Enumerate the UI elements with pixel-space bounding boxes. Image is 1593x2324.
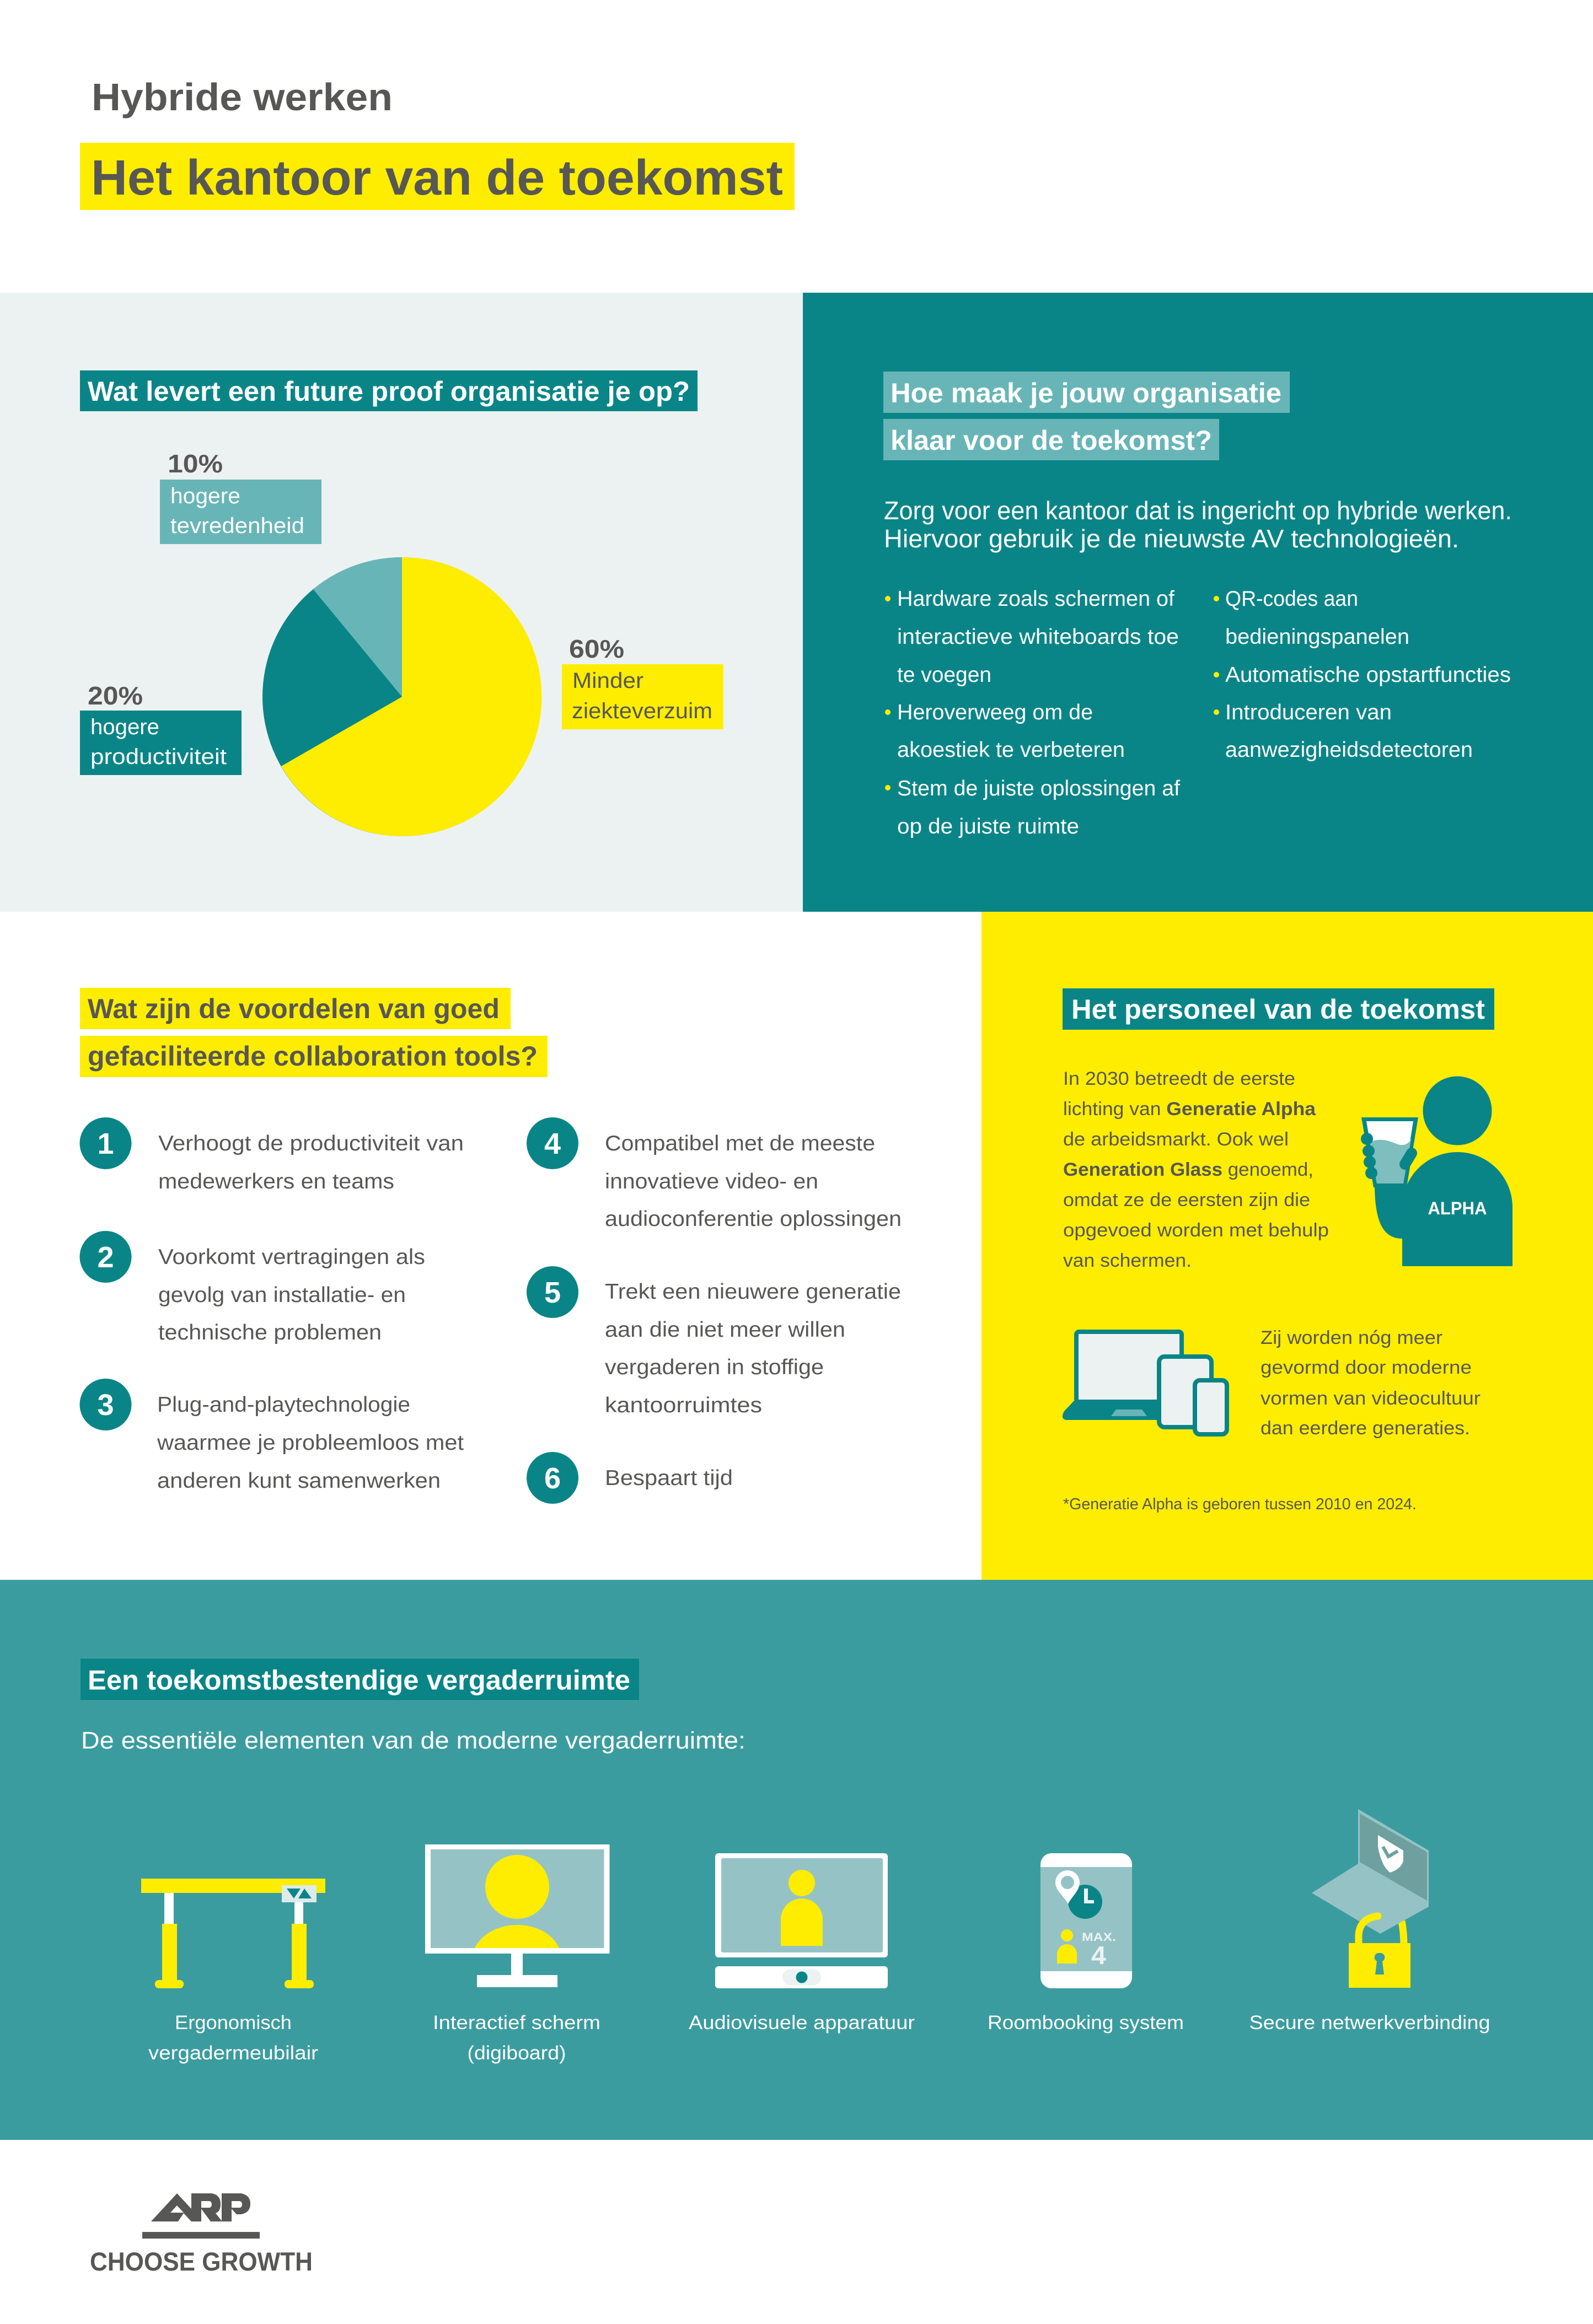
callout: 20% hogere productiviteit: productiviteit bbox=[90, 745, 227, 769]
icon: person holding a glass: ALPHA bbox=[1428, 1198, 1487, 1218]
pie chart bbox=[262, 557, 541, 836]
element: audiovisual equipment bbox=[689, 1853, 915, 2034]
element: secure network connection: Secure netwerkverbinding bbox=[1249, 2012, 1490, 2034]
text: videocultuur: Zij worden nóg meer bbox=[1261, 1327, 1442, 1348]
element: audiovisual equipment: Audiovisuele apparatuur bbox=[689, 2012, 915, 2034]
element: ergonomic furniture: Ergonomisch bbox=[175, 2012, 292, 2034]
callout: 60% minder ziekteverzuim: 60% bbox=[569, 634, 624, 663]
heading: Hoe maak je jouw organisatie klaar voor de toekomst: Hoe maak je jouw organisatie bbox=[891, 378, 1281, 408]
icon: booking panel bbox=[1040, 1853, 1132, 1988]
benefit 5: aan die niet meer willen bbox=[605, 1318, 845, 1342]
icon: screen with soundbar bbox=[715, 1853, 888, 1988]
text: Generatie Alpha bbox=[1063, 1068, 1329, 1271]
benefit 1: 1 bbox=[97, 1127, 114, 1160]
heading: Het personeel van de toekomst: Het personeel van de toekomst bbox=[1071, 994, 1485, 1025]
benefit 3: Plug-and-playtechnologie bbox=[157, 1393, 410, 1417]
bullet list: left column: akoestiek te verbeteren bbox=[897, 738, 1125, 762]
icon: laptop with padlock bbox=[1312, 1809, 1429, 1988]
heading: Wat zijn de voordelen: gefaciliteerde collaboration tools? bbox=[88, 1041, 538, 1072]
heading: Een toekomstbestendige vergaderruimte: Een toekomstbestendige vergaderruimte bbox=[88, 1665, 630, 1696]
text: Generatie Alpha: van schermen. bbox=[1063, 1250, 1192, 1271]
panel: how to make your organisation future ready bbox=[803, 293, 1593, 912]
benefit 4: Compatibel met de meeste bbox=[605, 1132, 875, 1155]
heading: Wat zijn de voordelen bbox=[80, 988, 548, 1077]
callout: 10% hogere tevredenheid: tevredenheid bbox=[170, 514, 304, 538]
element: roombooking system bbox=[988, 1853, 1184, 2034]
logo: ARP Choose Growth bbox=[90, 2193, 313, 2276]
benefit 2: technische problemen bbox=[158, 1321, 382, 1344]
icon: booking panel: 4 bbox=[1091, 1941, 1106, 1970]
benefit 6: Bespaart tijd bbox=[605, 1466, 733, 1490]
callout: 10% hogere tevredenheid: hogere bbox=[170, 484, 240, 508]
text: Generatie Alpha: lichting van Generatie Alpha bbox=[1063, 1099, 1316, 1120]
footnote: *Generatie Alpha is geboren tussen 2010 en 2024. bbox=[1063, 1495, 1417, 1513]
benefit 5: Trekt een nieuwere generatie bbox=[605, 1280, 901, 1304]
icon: height adjustable table bbox=[141, 1879, 325, 1988]
text: videocultuur bbox=[1261, 1327, 1481, 1439]
bullet list: left column bbox=[885, 587, 1180, 838]
icon: laptop, tablet and phone bbox=[1063, 1332, 1227, 1434]
bullet list: right column: QR-codes aan bbox=[1225, 587, 1358, 611]
benefit 3: anderen kunt samenwerken bbox=[157, 1469, 441, 1493]
callout: 10% hogere tevredenheid: 10% bbox=[168, 449, 223, 478]
intro text: Zorg voor een kantoor dat is ingericht op hybride werken. bbox=[884, 496, 1512, 525]
subheading: De essentiële elementen van de moderne vergaderruimte: bbox=[81, 1727, 745, 1754]
benefit 5: kantoorruimtes bbox=[605, 1394, 762, 1417]
text: videocultuur: dan eerdere generaties. bbox=[1261, 1418, 1470, 1439]
element: ergonomic furniture bbox=[141, 1879, 325, 2064]
icon: digiboard bbox=[425, 1844, 610, 1987]
bullet list: right column bbox=[1214, 587, 1511, 762]
text: Generatie Alpha: opgevoed worden met behulp bbox=[1063, 1220, 1329, 1241]
callout: 10% hogere tevredenheid bbox=[160, 449, 321, 544]
element: roombooking system: Roombooking system bbox=[988, 2012, 1184, 2034]
heading: Wat levert een future proof organisatie je op: Wat levert een future proof organisatie je op? bbox=[88, 376, 690, 407]
panel: benefits of collaboration tools bbox=[79, 988, 902, 1504]
tagline: CHOOSE GROWTH bbox=[90, 2247, 313, 2276]
benefit 3: 3 bbox=[97, 1389, 114, 1422]
element: interactive screen: (digiboard) bbox=[468, 2042, 566, 2064]
callout: 60% minder ziekteverzuim bbox=[562, 634, 723, 729]
heading: Hoe maak je jouw organisatie klaar voor de toekomst bbox=[883, 372, 1290, 460]
benefit 4 bbox=[527, 1117, 902, 1231]
icon: ARP wordmark bbox=[142, 2193, 260, 2239]
text: Generatie Alpha: In 2030 betreedt de eerste bbox=[1063, 1068, 1295, 1089]
benefit 1 bbox=[79, 1117, 464, 1193]
callout: 20% hogere productiviteit: hogere bbox=[90, 715, 159, 739]
panel: future proof organisation benefits bbox=[0, 293, 803, 912]
benefit 4: innovatieve video- en bbox=[605, 1170, 818, 1193]
benefit 4: audioconferentie oplossingen bbox=[605, 1207, 902, 1231]
text: Generatie Alpha: omdat ze de eersten zijn die bbox=[1063, 1190, 1310, 1211]
bullet list: left column: te voegen bbox=[897, 663, 991, 687]
title banner: Het kantoor van de toekomst bbox=[91, 150, 783, 206]
callout: 20% hogere productiviteit: 20% bbox=[88, 681, 143, 710]
benefit 3 bbox=[79, 1379, 464, 1493]
bullet list: left column: op de juiste ruimte bbox=[897, 815, 1079, 838]
icon: booking panel: MAX. bbox=[1082, 1931, 1116, 1944]
element: secure network connection bbox=[1249, 1809, 1490, 2034]
bullet list: right column: Automatische opstartfuncties bbox=[1225, 663, 1511, 687]
intro text bbox=[884, 496, 1512, 553]
bullet list: left column: Hardware zoals schermen of bbox=[897, 587, 1174, 611]
bullet list: left column: Stem de juiste oplossingen af bbox=[897, 777, 1180, 800]
bullet list: left column: Heroverweeg om de bbox=[897, 701, 1093, 724]
bullet list: right column: bedieningspanelen bbox=[1225, 625, 1409, 649]
element: ergonomic furniture: vergadermeubilair bbox=[148, 2042, 318, 2064]
panel: het personeel van de toekomst bbox=[981, 912, 1593, 1580]
callout: 20% hogere productiviteit bbox=[80, 681, 242, 775]
benefit 5: vergaderen in stoffige bbox=[605, 1355, 824, 1379]
benefit 5: 5 bbox=[544, 1276, 561, 1309]
benefit 6 bbox=[527, 1452, 733, 1504]
heading: Wat zijn de voordelen: Wat zijn de voordelen van goed bbox=[88, 993, 500, 1024]
heading: Hoe maak je jouw organisatie klaar voor de toekomst: klaar voor de toekomst? bbox=[891, 425, 1212, 456]
header: title block bbox=[80, 76, 795, 210]
benefit 2: Voorkomt vertragingen als bbox=[158, 1245, 425, 1269]
panel: toekomstbestendige vergaderruimte bbox=[0, 1580, 1593, 2140]
benefit 6: 6 bbox=[544, 1462, 561, 1495]
benefit 2 bbox=[79, 1231, 425, 1344]
bullet list: left column: interactieve whiteboards toe bbox=[897, 625, 1179, 649]
intro text: Hiervoor gebruik je de nieuwste AV technologieën. bbox=[884, 524, 1459, 553]
bullet list: right column: aanwezigheidsdetectoren bbox=[1225, 738, 1473, 762]
text: Generatie Alpha: de arbeidsmarkt. Ook wel bbox=[1063, 1129, 1289, 1150]
callout: 60% minder ziekteverzuim: Minder bbox=[572, 669, 643, 693]
bullet list: right column: Introduceren van bbox=[1225, 701, 1392, 724]
text: Generatie Alpha: Generation Glass genoemd, bbox=[1063, 1159, 1313, 1180]
element: interactive screen bbox=[425, 1844, 610, 2064]
benefit 3: waarmee je probleemloos met bbox=[157, 1431, 464, 1455]
callout: 60% minder ziekteverzuim: ziekteverzuim bbox=[572, 699, 712, 723]
benefit 2: gevolg van installatie- en bbox=[158, 1283, 406, 1307]
benefit 5 bbox=[527, 1266, 901, 1417]
icon: person holding a glass bbox=[1361, 1076, 1512, 1266]
benefit 1: Verhoogt de productiviteit van bbox=[158, 1132, 464, 1155]
benefit 4: 4 bbox=[544, 1127, 561, 1160]
text: videocultuur: gevormd door moderne bbox=[1261, 1357, 1472, 1378]
text: videocultuur: vormen van videocultuur bbox=[1261, 1388, 1481, 1409]
element: interactive screen: Interactief scherm bbox=[433, 2012, 600, 2034]
benefit 1: medewerkers en teams bbox=[158, 1170, 394, 1193]
benefit 2: 2 bbox=[97, 1241, 114, 1274]
supertitle: Hybride werken bbox=[92, 76, 393, 119]
